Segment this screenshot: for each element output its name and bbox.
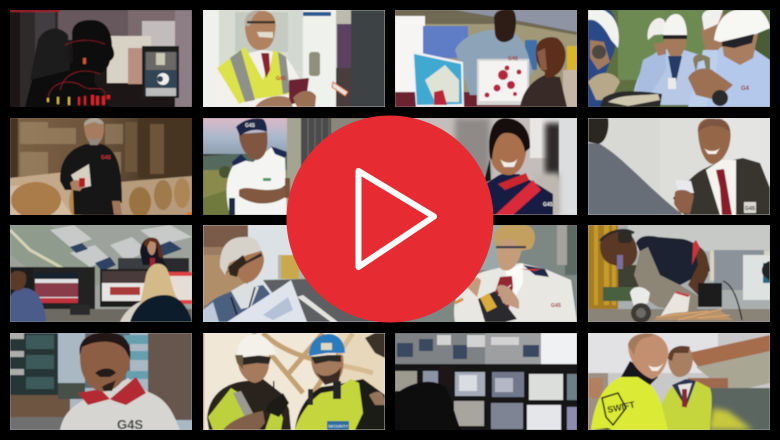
panel: officer in cap at pillar: G4S bbox=[245, 123, 256, 129]
button circle bbox=[286, 116, 494, 322]
panel: man in white G4S polo: G4S bbox=[117, 417, 143, 432]
panel: worker grinding metal with sparks bbox=[588, 225, 770, 322]
panel: businessman showing ID card: G4S bbox=[745, 206, 756, 212]
panel: operators viewing map screens: G4S bbox=[508, 56, 519, 62]
panel: engineers in hard hats: G4 bbox=[741, 86, 750, 92]
panel: officer in cap at pillar bbox=[203, 118, 368, 215]
panel: two security men in hi-vis vests: SECURITY bbox=[328, 424, 349, 428]
icon: play triangle bbox=[358, 171, 434, 267]
panel: two security men in hi-vis vests bbox=[203, 333, 385, 430]
panel: officer with handheld scanner: G4S bbox=[551, 303, 562, 309]
panel: airport officer with passport bbox=[203, 10, 385, 107]
panel: whisky barrel warehouse bbox=[10, 118, 192, 215]
panel: smiling employee in navy and red bbox=[412, 118, 577, 215]
panel: two men in yellow jackets: SWIFT bbox=[606, 399, 636, 415]
panel: CCTV monitor wall with operator bbox=[395, 333, 577, 430]
panel: engineers in hard hats bbox=[588, 10, 770, 107]
panel: whisky barrel warehouse: G4S bbox=[101, 155, 112, 161]
panel: engineer in white hard hat with plans bbox=[203, 225, 380, 322]
panel: man in white G4S polo bbox=[10, 333, 192, 432]
panel: officer with handheld scanner bbox=[400, 225, 577, 322]
panel: operators viewing map screens bbox=[395, 10, 577, 107]
panel: businessman showing ID card bbox=[588, 118, 770, 215]
panel: airport officer with passport: G4S bbox=[276, 76, 287, 82]
panel: monitoring room with aerial view bbox=[10, 225, 192, 322]
panel: two men in yellow jackets bbox=[588, 333, 770, 430]
panel: control room silhouette bbox=[10, 10, 192, 107]
play button bbox=[286, 116, 494, 322]
panel: smiling employee in navy and red: G4S bbox=[543, 202, 554, 208]
